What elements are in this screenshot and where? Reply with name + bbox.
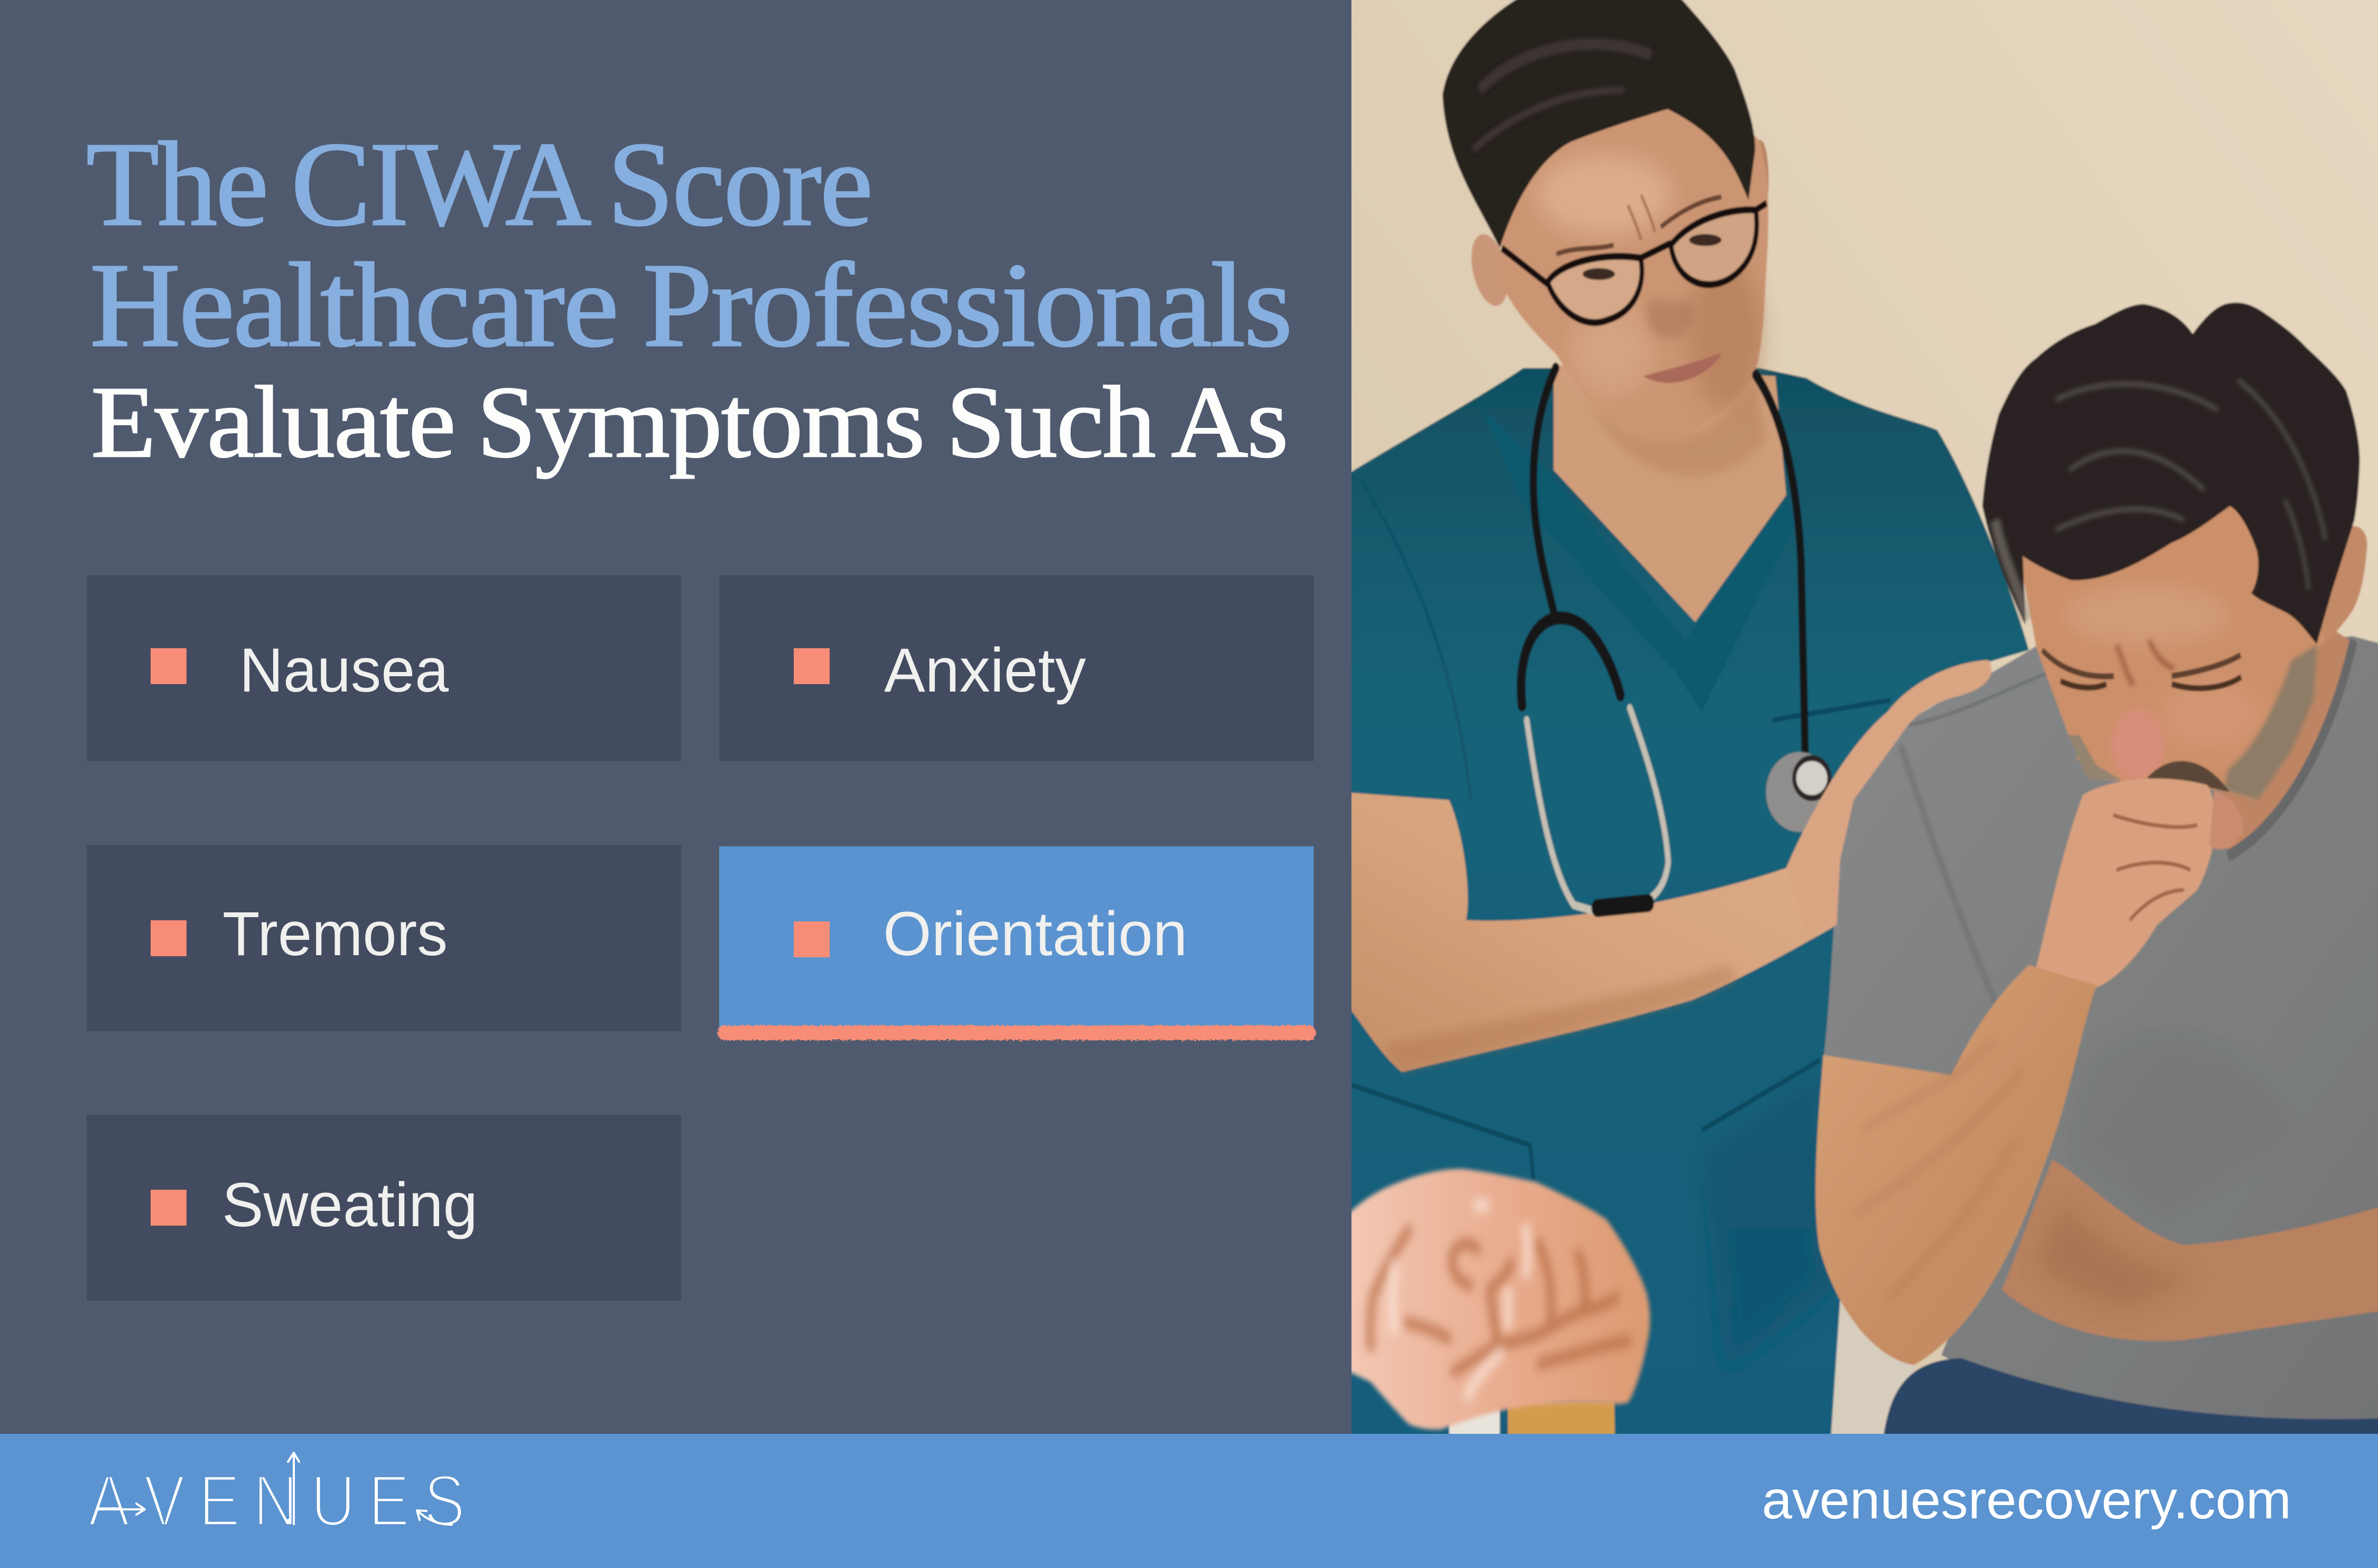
nurse arm xyxy=(1341,792,1840,1072)
hair grey streaks xyxy=(1995,380,2325,620)
footer band xyxy=(0,1434,2378,1568)
patient hair xyxy=(1982,303,2360,644)
stethoscope yoke xyxy=(1521,618,1620,705)
scrubs sleeve seam xyxy=(1362,480,1471,800)
label: Tremors xyxy=(222,899,448,969)
nurse hair xyxy=(1443,0,1755,248)
nurse hand on shoulder xyxy=(1786,660,1992,935)
patient brow crease xyxy=(2116,640,2174,685)
symptom card: Sweating xyxy=(87,1115,681,1301)
glasses frame xyxy=(1502,203,1767,323)
nurse neck xyxy=(1554,365,1786,622)
shirt shadow xyxy=(2063,1027,2292,1220)
patient forehead highlight xyxy=(2063,585,2231,645)
nurse ear xyxy=(1464,226,1515,315)
shirt sleeve fold xyxy=(1901,745,1999,1010)
photo: nurse comforting coughing patient xyxy=(1341,0,2378,1450)
patient lower arm xyxy=(2002,1160,2378,1341)
nurse face xyxy=(1500,90,1768,438)
patient face xyxy=(2015,497,2325,800)
patient ear xyxy=(2317,526,2367,652)
title xyxy=(86,118,1291,479)
face highlight xyxy=(1537,155,1671,235)
patient eye lines xyxy=(2060,677,2241,688)
patient forearm xyxy=(1816,965,2096,1365)
wall xyxy=(1341,0,2378,1450)
face lower lit area xyxy=(1571,305,1651,395)
patient neck xyxy=(2076,620,2349,852)
patient nose xyxy=(2111,709,2165,781)
stethoscope right tube xyxy=(1756,375,1805,750)
patient stubble xyxy=(2224,645,2317,800)
glasses lenses xyxy=(1548,256,1642,323)
label: Anxiety xyxy=(884,636,1086,705)
coral underline xyxy=(718,1025,1316,1040)
nurse brows and frown xyxy=(1556,197,1722,254)
symptom card: Nausea xyxy=(87,575,681,761)
patient shirt xyxy=(1823,636,2378,1427)
shirt shoulder seam xyxy=(1908,670,2056,725)
lower wall gap xyxy=(1831,1302,1914,1434)
bullet square xyxy=(151,1190,187,1226)
patient cheek glow xyxy=(2160,680,2261,750)
face cheek shadow xyxy=(1688,260,1762,410)
symptom card: Tremors xyxy=(87,845,681,1031)
nurse mouth xyxy=(1643,353,1722,383)
patient fist xyxy=(2036,779,2216,990)
scrubs neckline band xyxy=(1483,410,1794,712)
bullet square xyxy=(151,920,187,956)
patient brows xyxy=(2042,650,2241,676)
frown crease xyxy=(1628,195,1655,240)
bullet square xyxy=(151,648,187,684)
shirt collar xyxy=(2228,640,2354,856)
brain body xyxy=(1348,1169,1650,1430)
bullet square xyxy=(794,921,830,957)
bullet square xyxy=(794,648,830,684)
nurse ear right xyxy=(1752,140,1769,220)
logo wordmark: AVENUES xyxy=(88,1460,465,1542)
stubble left of nose xyxy=(2069,735,2121,780)
stethoscope xyxy=(1521,368,1805,912)
arm shadow xyxy=(1382,965,1739,1072)
hair sheen xyxy=(1473,44,1651,150)
title line 2: Healthcare Professionals xyxy=(90,239,1291,372)
title line 3: Evaluate Symptoms Such As xyxy=(91,365,1287,479)
patient moustache xyxy=(2147,761,2230,792)
title line 1: The CIWA Score xyxy=(86,118,871,251)
logo arrows xyxy=(97,1453,452,1525)
stethoscope metal tubes xyxy=(1527,708,1668,912)
thumb knuckle xyxy=(2209,790,2243,850)
left panel background xyxy=(0,0,1353,1435)
symptom card: Orientation (highlighted) xyxy=(718,846,1316,1040)
stethoscope chest piece xyxy=(1766,752,1833,832)
label: Orientation xyxy=(883,899,1187,969)
brain stem gold xyxy=(1508,1402,1615,1445)
neck shadow xyxy=(1584,385,1766,477)
finger lines xyxy=(2113,815,2197,920)
stethoscope connector xyxy=(1597,903,1648,908)
logo: Avenues xyxy=(88,1453,465,1542)
lower arm shadow xyxy=(2036,1200,2197,1310)
label: Sweating xyxy=(222,1170,478,1240)
nurse nose xyxy=(1647,300,1694,338)
dark scrub fold xyxy=(1698,1070,1833,1370)
symptom card: Anxiety xyxy=(719,575,1314,761)
label: Nausea xyxy=(239,636,449,705)
brain highlights xyxy=(1392,1205,1528,1400)
stethoscope left tube xyxy=(1534,368,1556,612)
patient arm hair texture xyxy=(1854,1040,2022,1300)
scrubs pocket line xyxy=(1351,700,1891,1180)
nurse scrubs xyxy=(1341,368,2029,1450)
nurse eyes xyxy=(1583,268,1615,280)
patient jeans xyxy=(1882,1358,2378,1450)
brain model xyxy=(1348,1169,1650,1445)
brain folds xyxy=(1370,1227,1631,1373)
brain stem white xyxy=(1449,1405,1500,1445)
website url: avenuesrecovery.com xyxy=(1762,1470,2291,1530)
